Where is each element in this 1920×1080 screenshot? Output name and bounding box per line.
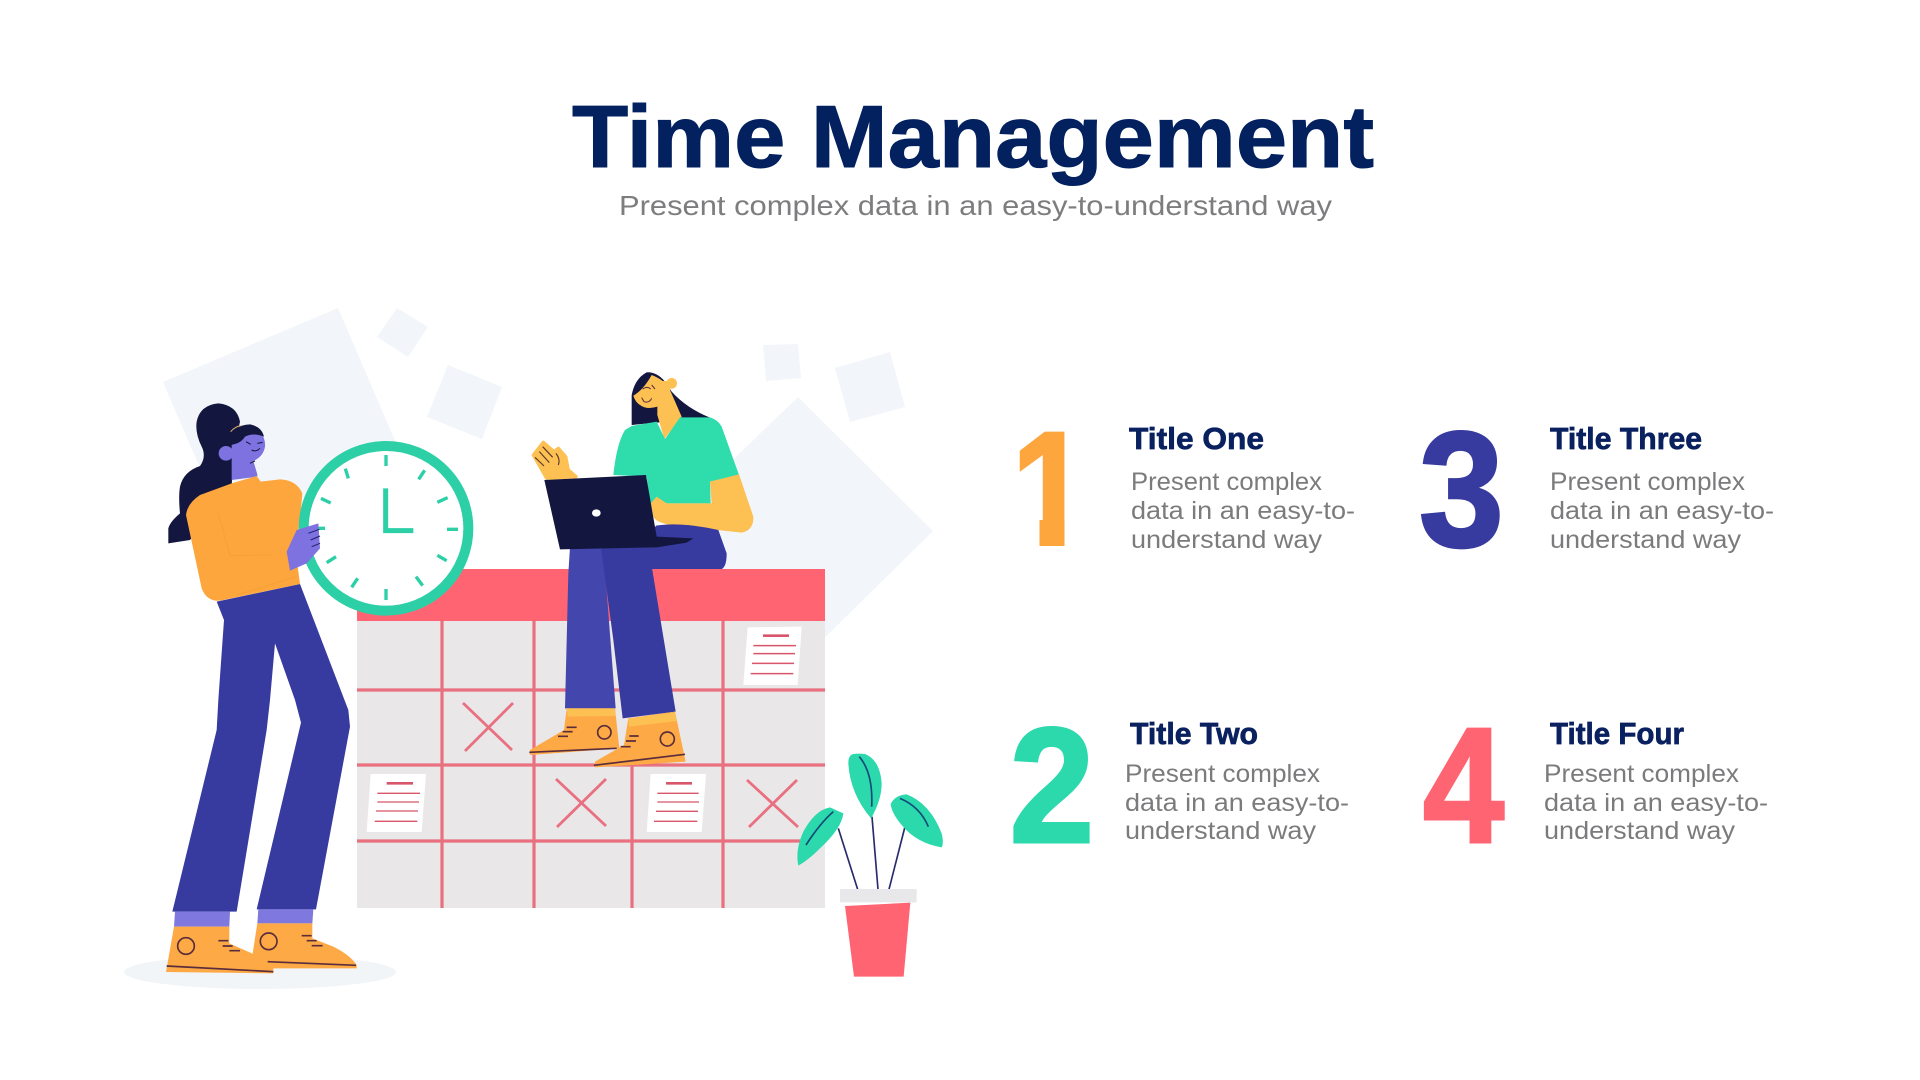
ear — [666, 378, 677, 389]
number 1: 1 — [1012, 398, 1089, 582]
socks — [174, 909, 313, 927]
back leg — [565, 547, 616, 708]
hair — [168, 403, 240, 543]
body text: data in an easy-to- — [1550, 497, 1774, 525]
sitting woman with laptop — [529, 372, 753, 767]
thigh — [602, 524, 727, 569]
ground shadow — [124, 955, 396, 989]
face details — [642, 385, 655, 402]
item 3 — [1419, 398, 1774, 581]
body text: understand way — [1125, 817, 1317, 845]
head — [632, 372, 710, 439]
trousers — [172, 584, 350, 912]
face and neck — [633, 375, 682, 439]
face and neck — [232, 432, 265, 480]
clock — [304, 446, 468, 611]
item 1 — [1020, 426, 1354, 553]
body text: understand way — [1131, 526, 1323, 554]
left shoe — [529, 708, 619, 755]
hair — [632, 372, 710, 425]
item 2 — [1010, 694, 1349, 877]
number 4: 4 — [1423, 693, 1504, 877]
leaf veins — [806, 757, 928, 845]
stems — [838, 817, 906, 889]
waving hand — [533, 442, 576, 478]
heading: Title Three — [1550, 421, 1702, 456]
number 3: 3 — [1419, 398, 1504, 581]
body text: data in an easy-to- — [1125, 789, 1349, 817]
sticky note left — [367, 774, 426, 832]
sticky note center — [647, 774, 706, 832]
pot rim — [840, 889, 917, 902]
head — [219, 424, 265, 480]
shirt — [613, 417, 739, 503]
cross marks — [463, 703, 798, 827]
body text: Present complex — [1544, 760, 1740, 788]
body text: understand way — [1544, 817, 1736, 845]
front leg — [601, 547, 676, 718]
plant — [797, 754, 943, 977]
right shoe — [594, 712, 686, 767]
body text: data in an easy-to- — [1544, 789, 1768, 817]
heading: Title Two — [1130, 716, 1258, 751]
background shapes — [163, 308, 933, 665]
fringe — [225, 424, 264, 445]
face details — [246, 442, 263, 463]
standing woman upper body and clock — [168, 403, 468, 611]
subtitle: Present complex data in an easy-to-understand way — [619, 190, 1332, 221]
laptop — [544, 475, 693, 549]
hair band — [231, 426, 241, 432]
number 1 stem foot — [1040, 520, 1064, 546]
sweater fold — [218, 513, 297, 595]
hand — [287, 523, 320, 571]
pot — [845, 903, 910, 977]
ear — [219, 446, 233, 461]
body text: Present complex — [1125, 760, 1321, 788]
leaves — [797, 754, 943, 866]
number 2: 2 — [1010, 694, 1094, 877]
calendar — [357, 569, 825, 908]
body text: data in an easy-to- — [1131, 497, 1355, 525]
standing woman legs — [166, 584, 357, 973]
left shoe — [166, 927, 273, 973]
right shoe — [253, 923, 357, 968]
body text: Present complex — [1550, 468, 1746, 496]
item 4 — [1423, 693, 1768, 877]
heading: Title One — [1129, 421, 1264, 456]
heading: Title Four — [1550, 716, 1684, 751]
sweater — [186, 476, 302, 601]
body text: Present complex — [1131, 468, 1323, 496]
title: Time Management — [572, 87, 1374, 186]
arm — [651, 474, 753, 533]
sticky note top right — [743, 627, 802, 685]
body text: understand way — [1550, 526, 1742, 554]
